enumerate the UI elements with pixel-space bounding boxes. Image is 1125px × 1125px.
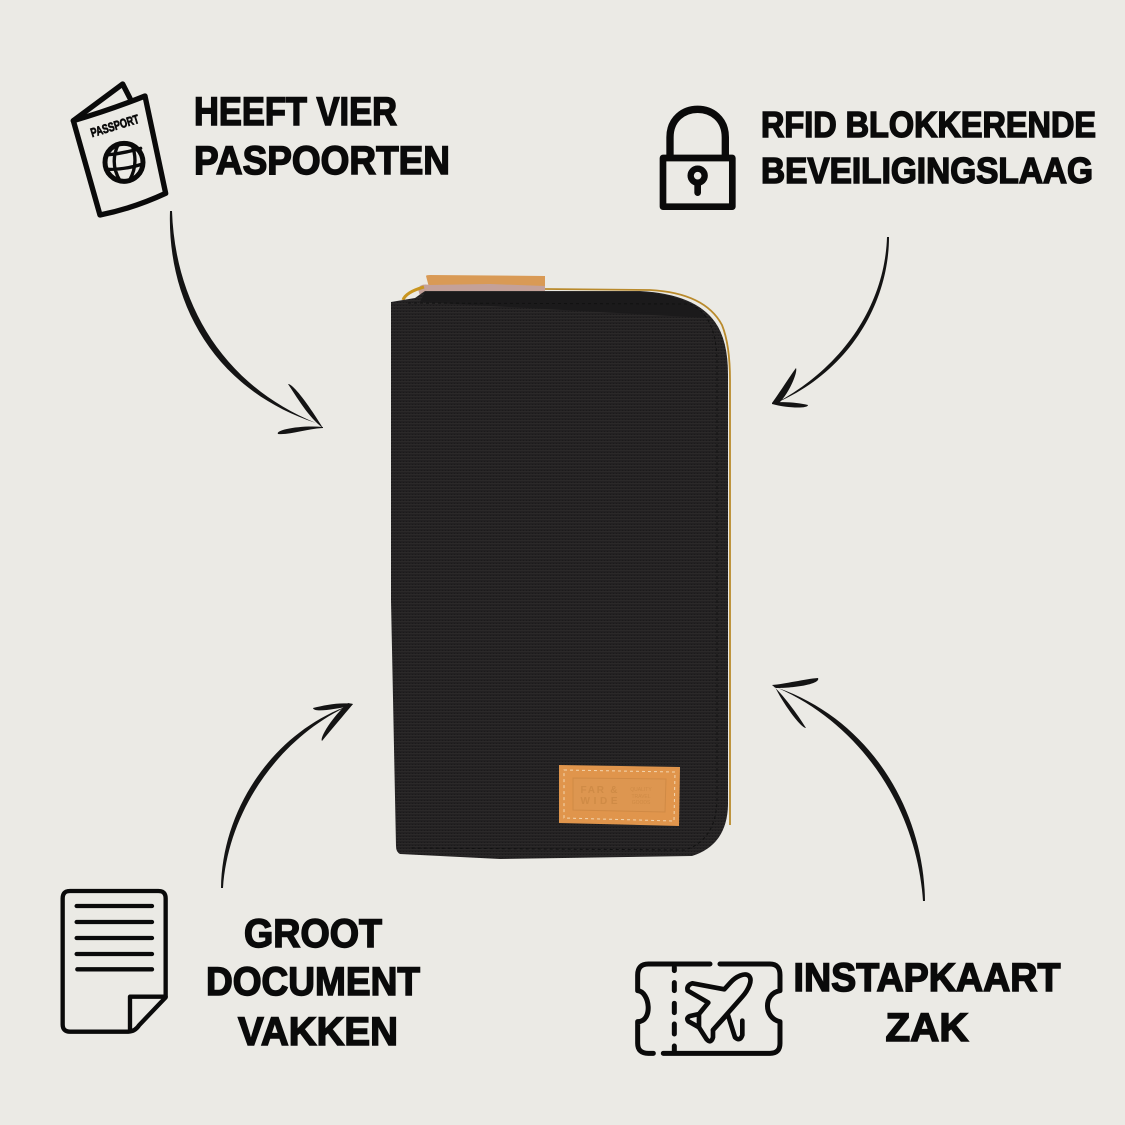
product: black travel wallet	[391, 275, 730, 859]
stitching	[408, 303, 717, 850]
leather label: TRAVEL	[631, 794, 651, 800]
icon: padlock	[663, 109, 732, 207]
heading: rfid blokkerende beveiligingslaag: RFID BLOKKERENDE	[761, 104, 1096, 145]
leather label: FAR &	[580, 785, 618, 796]
arrow: top left	[170, 211, 323, 434]
heading: instapkaart zak: ZAK	[886, 1006, 969, 1050]
heading: groot document vakken	[206, 912, 420, 1054]
heading: groot document vakken: GROOT	[244, 912, 382, 956]
heading: heeft vier paspoorten	[194, 90, 450, 183]
heading: groot document vakken: DOCUMENT	[206, 960, 420, 1004]
arrow: bottom right	[772, 678, 925, 901]
gold zipper edge	[545, 289, 730, 825]
icon: passport	[73, 84, 166, 215]
heading: instapkaart zak: INSTAPKAART	[794, 956, 1060, 1000]
zipper tape shading	[420, 292, 708, 318]
heading: rfid blokkerende beveiligingslaag	[761, 104, 1096, 191]
leather label	[559, 765, 680, 826]
arrow: top right	[772, 237, 889, 408]
heading: heeft vier paspoorten: HEEFT VIER	[194, 90, 397, 134]
icon: passport: PASSPORT	[89, 112, 141, 140]
heading: heeft vier paspoorten: PASPOORTEN	[194, 139, 450, 183]
leather label: QUALITY	[630, 787, 652, 793]
heading: groot document vakken: VAKKEN	[238, 1010, 398, 1054]
leather label: GOODS	[632, 800, 651, 806]
arrow: bottom left	[221, 703, 353, 888]
heading: instapkaart zak	[794, 956, 1060, 1050]
icon: boarding pass with plane	[638, 964, 780, 1053]
icon: document	[63, 891, 166, 1032]
heading: rfid blokkerende beveiligingslaag: BEVEILIGINGSLAAG	[761, 150, 1093, 191]
wallet body	[391, 291, 728, 859]
leather label: WIDE	[580, 796, 618, 807]
zipper pull tab	[403, 275, 545, 300]
